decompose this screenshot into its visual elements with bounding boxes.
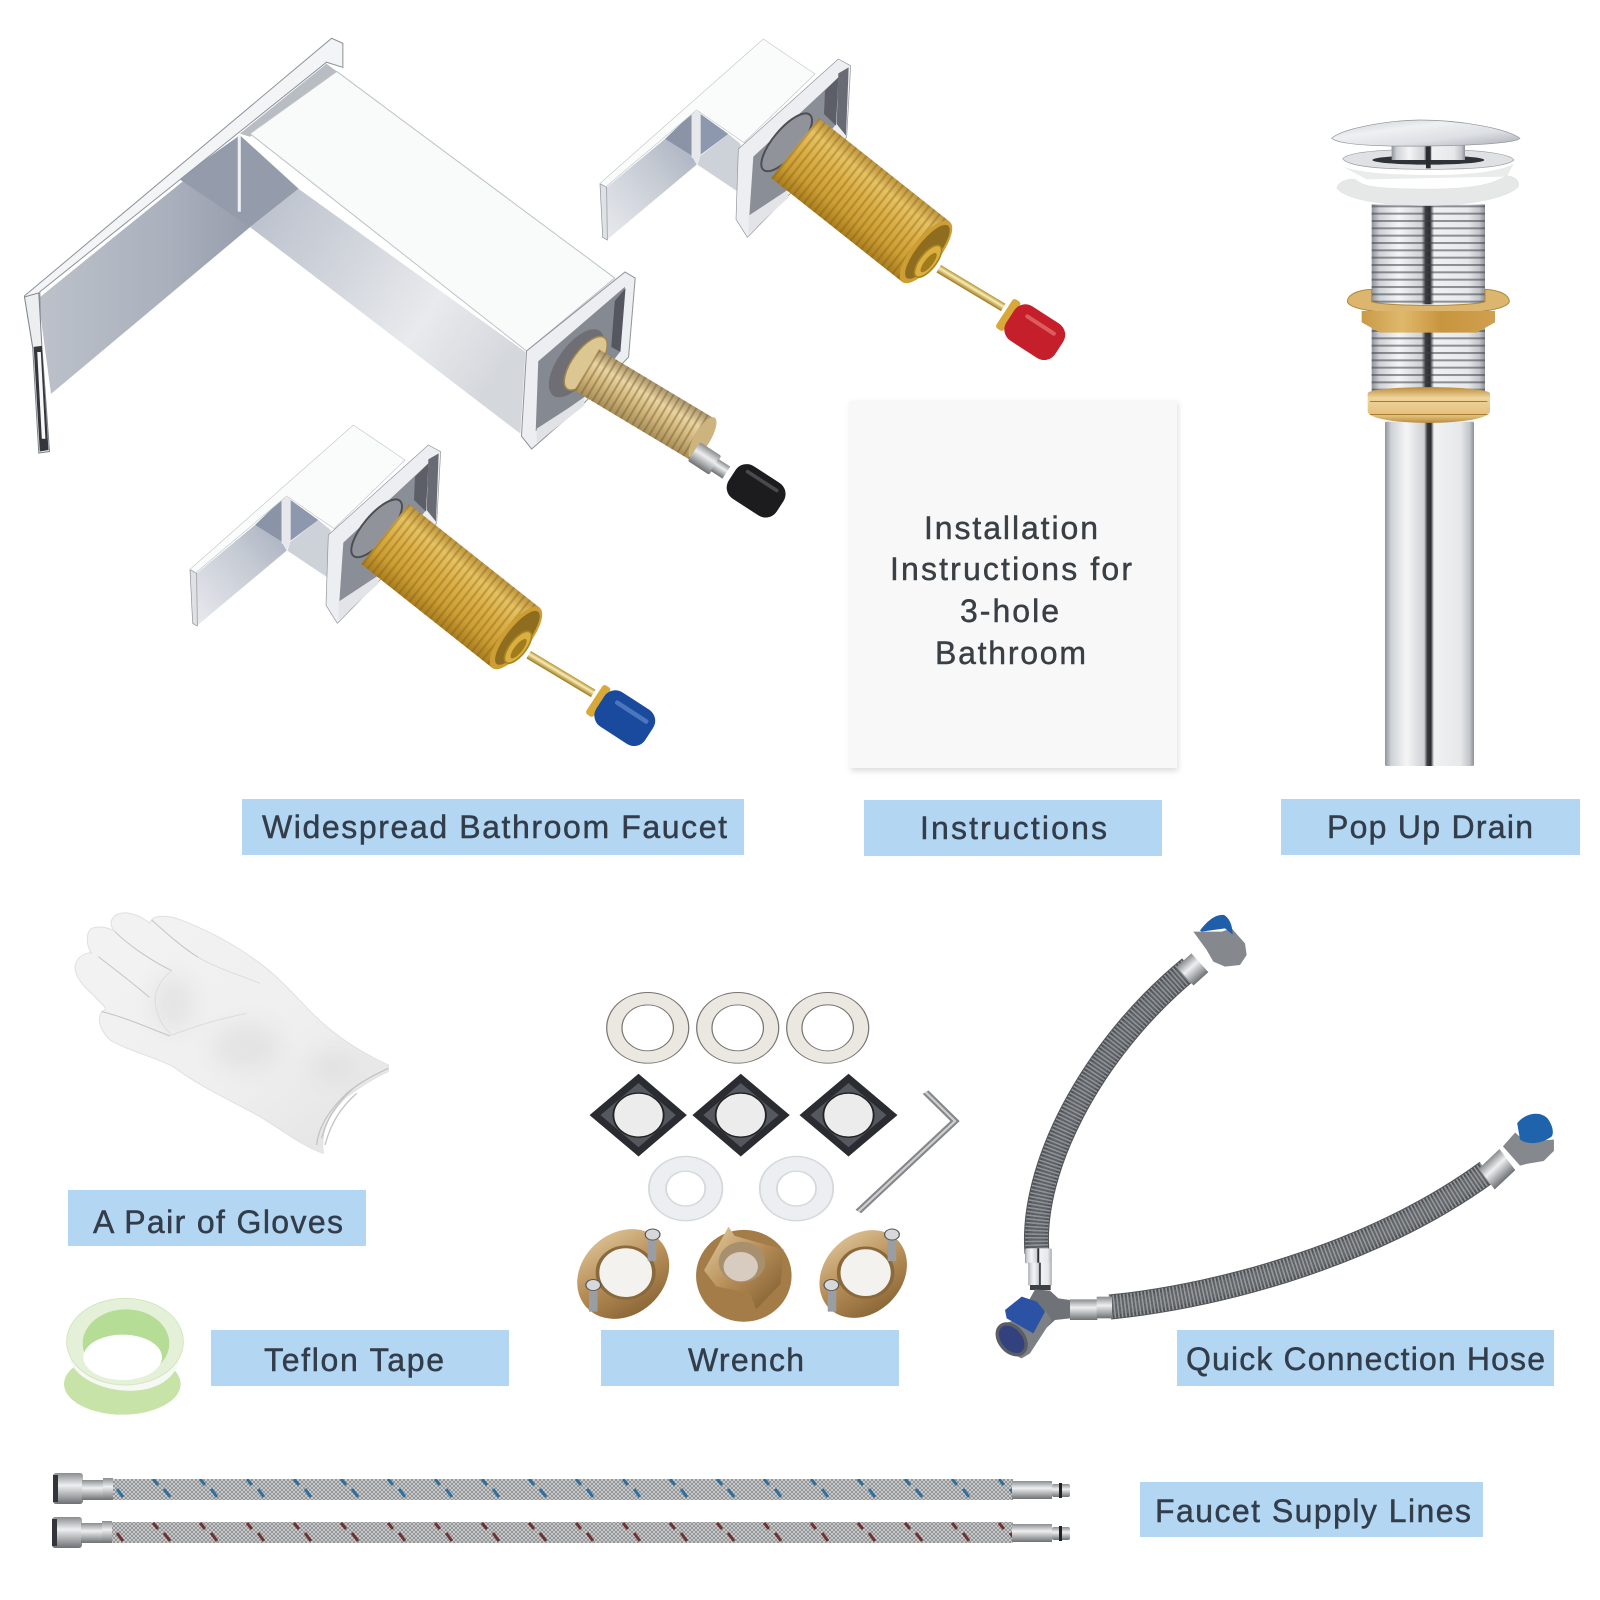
label: quick connection hose — [1177, 1330, 1554, 1386]
product: widespread faucet spout — [24, 38, 791, 523]
label: wrench: Wrench — [688, 1342, 804, 1378]
silver connector — [688, 442, 733, 482]
sheet text — [890, 510, 1132, 671]
label: quick connection hose: Quick Connection Hose — [1186, 1341, 1545, 1377]
glove shading — [153, 977, 357, 1080]
flat washers — [607, 993, 869, 1063]
brass flange — [1347, 289, 1509, 314]
white under-ring — [1342, 163, 1514, 179]
panel: instruction sheet — [849, 401, 1178, 771]
tee fitting — [991, 1248, 1112, 1360]
spout lip — [24, 293, 49, 453]
label: wrench — [601, 1330, 899, 1386]
left brass nut — [562, 1220, 684, 1328]
spout polished rim — [24, 38, 343, 347]
stopper cap — [1332, 120, 1520, 146]
top fitting — [1177, 915, 1247, 986]
product: blue handle — [190, 425, 660, 751]
hose one — [1036, 968, 1190, 1253]
hose two — [1110, 1172, 1487, 1307]
sheet text: Instructions for — [890, 551, 1132, 587]
body top — [250, 71, 615, 351]
sheet text: 3-hole — [960, 593, 1059, 629]
label: faucet supply lines — [1140, 1482, 1483, 1537]
label: gloves: A Pair of Gloves — [93, 1204, 343, 1240]
label: faucet supply lines: Faucet Supply Lines — [1155, 1493, 1471, 1529]
square gaskets — [590, 1074, 897, 1156]
lower flange ring — [1343, 149, 1514, 169]
glove palm folds — [155, 957, 260, 1035]
product: red supply line — [52, 1517, 1070, 1548]
chrome tube — [1385, 422, 1474, 766]
sheet text: Installation — [924, 510, 1098, 546]
sheet text: Bathroom — [935, 635, 1086, 671]
upper thread — [1372, 204, 1485, 304]
stem flange — [538, 320, 615, 406]
right brass nut — [805, 1222, 921, 1326]
hex key — [858, 1092, 955, 1212]
product: teflon tape — [64, 1298, 183, 1415]
glove cuff — [317, 1068, 388, 1145]
clear rings — [649, 1156, 833, 1221]
brass nut — [1368, 387, 1490, 423]
blue cap — [583, 681, 660, 751]
product: gloves — [75, 913, 388, 1153]
product: wrench hardware kit — [562, 993, 955, 1328]
body side — [250, 189, 526, 434]
label: instructions — [864, 800, 1162, 856]
stopper stem — [1392, 145, 1465, 162]
lower thread — [1372, 328, 1485, 393]
product: pop up drain — [1332, 120, 1520, 766]
centre brass nut — [696, 1227, 792, 1322]
label: instructions: Instructions — [920, 810, 1107, 846]
label: teflon tape — [211, 1330, 509, 1386]
black cap — [722, 459, 791, 523]
label: faucet: Widespread Bathroom Faucet — [262, 809, 727, 845]
product: quick connection hose — [991, 915, 1554, 1360]
red cap — [993, 295, 1070, 365]
label: teflon tape: Teflon Tape — [264, 1342, 444, 1378]
threaded stem — [574, 349, 714, 459]
label: gloves — [68, 1190, 366, 1246]
end plate — [521, 272, 635, 449]
label: drain — [1281, 799, 1580, 855]
product: blue supply line — [53, 1473, 1070, 1504]
white gasket — [1337, 176, 1519, 206]
right fitting — [1479, 1114, 1554, 1190]
glove creases — [98, 920, 198, 1036]
label: faucet — [242, 799, 744, 855]
brass hex — [1362, 311, 1495, 333]
label: drain: Pop Up Drain — [1327, 809, 1533, 845]
spout plate — [38, 135, 298, 394]
product: red handle — [600, 39, 1070, 365]
